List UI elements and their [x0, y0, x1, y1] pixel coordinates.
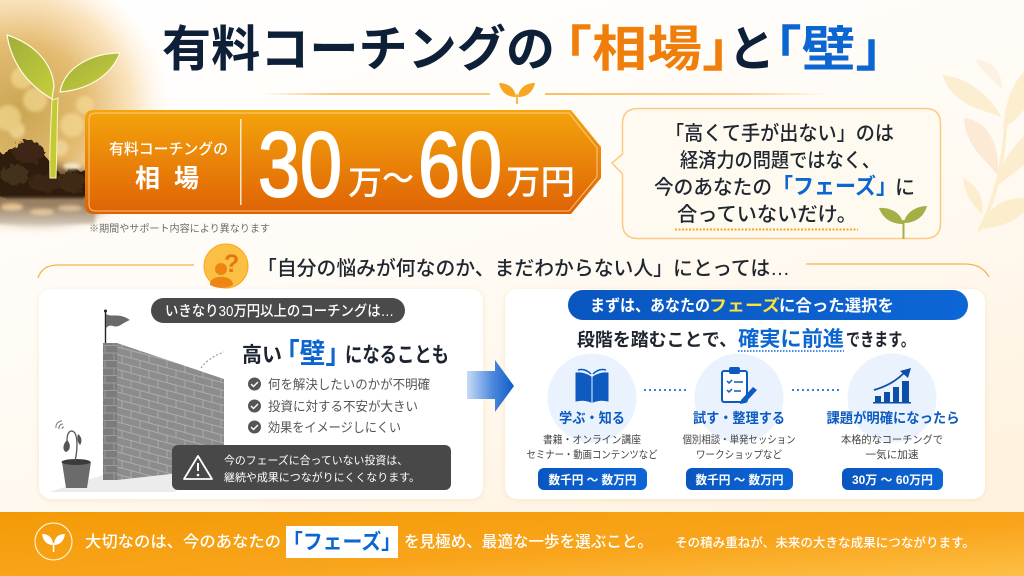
price pills — [538, 468, 943, 490]
banner label: 有料コーチングの — [109, 141, 228, 158]
heading: high wall: になることも — [345, 344, 449, 367]
phase titles: 課題が明確になったら — [826, 410, 960, 426]
illustration: wall with flag — [49, 310, 224, 492]
illustration: wilted plant — [56, 421, 91, 488]
bubble text: 「フェーズ」 — [772, 174, 897, 199]
arrow — [467, 360, 514, 412]
icon: sprout — [7, 35, 120, 178]
footnote: ※期間やサポート内容により異なります — [89, 222, 270, 235]
banner price: 〜 — [382, 160, 414, 197]
price banner — [85, 110, 601, 216]
price pills: 30万 〜 60万円 — [852, 473, 933, 487]
phase titles: 学ぶ・知る — [559, 410, 625, 426]
heading: high wall: 「壁」 — [274, 338, 351, 369]
banner price: 60 — [418, 114, 502, 216]
phase titles — [559, 410, 960, 426]
check list — [248, 377, 430, 435]
decorative leaves top right — [942, 60, 1024, 232]
panel: phases — [505, 289, 985, 499]
circles — [548, 354, 936, 442]
speech bubble — [612, 108, 940, 239]
bubble text: 合っていないだけ。 — [677, 203, 857, 226]
title: 「壁」 — [748, 23, 909, 77]
phase descriptions: セミナー・動画コンテンツなど — [526, 448, 658, 461]
section heading: 「自分の悩みが何なのか、まだわからない人」にとっては… — [257, 257, 790, 280]
phase descriptions: 個別相談・単発セッション — [682, 433, 796, 446]
bubble text: に — [895, 177, 915, 199]
bubble text — [654, 122, 915, 226]
bubble text: 今のあなたの — [654, 176, 772, 199]
highlighted word — [283, 526, 401, 558]
pill: heading: いきなり30万円以上のコーチングは… — [165, 303, 394, 320]
pill: phases heading: まずは、あなたの — [590, 297, 710, 315]
icon: sprout in circle — [35, 523, 72, 560]
banner label — [109, 141, 228, 193]
icon: growth chart — [873, 368, 911, 404]
banner price: 万円 — [506, 164, 575, 202]
pill: phases heading: フェーズ — [709, 296, 780, 315]
pill: heading — [151, 298, 405, 323]
panel: high wall — [39, 289, 483, 499]
check list: 投資に対する不安が大きい — [268, 399, 418, 414]
pill: phases heading: に合った選択を — [779, 297, 894, 315]
phase descriptions: 書籍・オンライン講座 — [543, 433, 641, 446]
band message: 大切なのは、今のあなたの — [85, 533, 281, 551]
subheading: 確実に前進 — [738, 328, 844, 351]
band message: を見極め、最適な一歩を選ぶこと。 — [404, 533, 653, 551]
heading: high wall — [242, 338, 449, 369]
pill: phases heading — [568, 290, 968, 320]
title — [162, 23, 909, 77]
warning callout: 今のフェーズに合っていない投資は、 — [224, 453, 408, 467]
check list: 何を解決したいのかが不明確 — [268, 377, 430, 392]
banner price: 30 — [258, 114, 342, 216]
phase descriptions: 一気に加速 — [866, 448, 919, 461]
icon: book — [576, 370, 608, 402]
band message — [85, 533, 975, 551]
band message: その積み重ねが、未来の大きな成果につながります。 — [675, 535, 975, 550]
banner price — [258, 114, 575, 216]
title: と — [728, 23, 775, 77]
banner label: 相場 — [135, 165, 199, 193]
icon: small sprout — [879, 206, 927, 239]
title: 有料コーチングの — [162, 23, 555, 77]
subheading: 段階を踏むことで、 — [577, 330, 737, 350]
phase descriptions — [526, 433, 943, 461]
icon: checklist — [722, 367, 757, 404]
highlighted word: 「フェーズ」 — [283, 530, 401, 554]
title: 「相場」 — [537, 23, 757, 77]
icon: person with question mark — [204, 244, 248, 288]
section heading — [38, 244, 989, 288]
subheading: できます。 — [846, 330, 915, 350]
photo: sprout growing from soil with golden bokeh — [0, 0, 162, 234]
bubble text: 経済力の問題ではなく、 — [680, 149, 880, 172]
phase descriptions: 本格的なコーチングで — [841, 433, 943, 446]
bubble text: 「高くて手が出ない」のは — [665, 122, 894, 145]
phase descriptions: ワークショップなど — [696, 449, 782, 461]
title divider with sprout — [262, 83, 830, 104]
heading: high wall: 高い — [242, 344, 282, 367]
warning callout: 継続や成果につながりにくくなります。 — [224, 470, 420, 484]
price pills: 数千円 〜 数万円 — [548, 472, 636, 487]
banner price: 万 — [348, 164, 382, 201]
bottom band — [0, 512, 1024, 576]
icon: person with question mark: ? — [224, 250, 239, 278]
check list: 効果をイメージしにくい — [268, 420, 401, 435]
price pills: 数千円 〜 数万円 — [696, 472, 784, 487]
subheading — [577, 328, 915, 351]
phase titles: 試す・整理する — [693, 410, 785, 426]
warning callout — [172, 445, 451, 490]
